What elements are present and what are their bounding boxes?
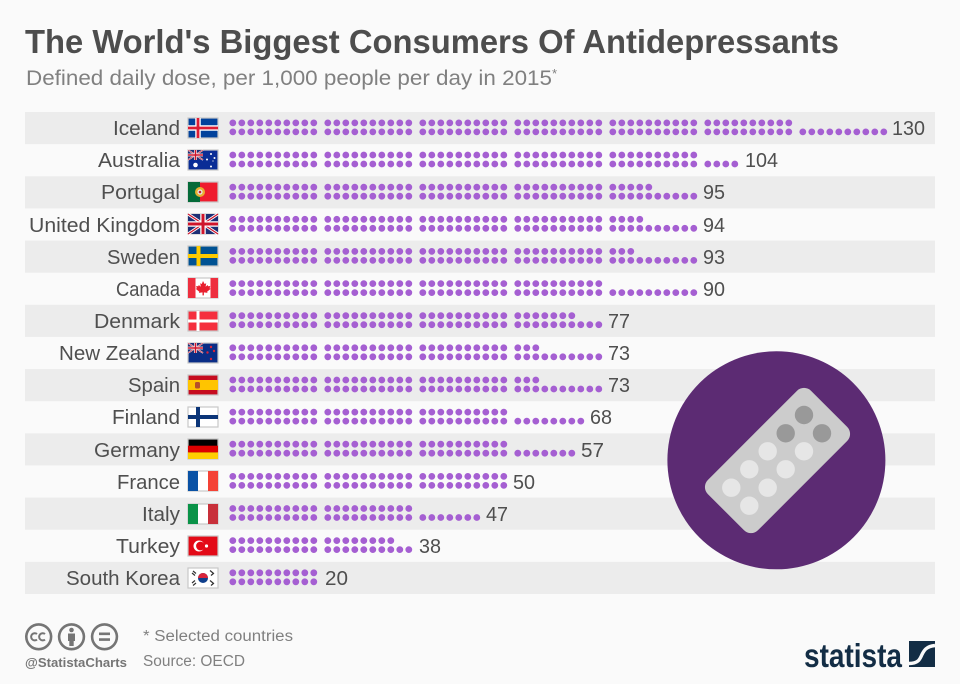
row: Iceland	[25, 112, 935, 144]
label: United Kingdom: United Kingdom	[29, 215, 180, 237]
flag: Portugal	[188, 182, 218, 202]
value: 95: 95	[703, 181, 725, 204]
value: 73: 73	[608, 342, 630, 365]
label: Turkey: Turkey	[116, 536, 180, 558]
value: 77: 77	[608, 310, 630, 333]
icons: creative commons	[26, 624, 117, 649]
label: Italy: Italy	[142, 504, 180, 526]
credit: StatistaCharts: @StatistaCharts	[25, 656, 127, 670]
flag: France	[188, 471, 218, 491]
row: Germany	[25, 433, 935, 465]
subtitle: *	[552, 66, 557, 81]
row: Finland	[112, 406, 612, 429]
label: Finland: Finland	[112, 407, 180, 429]
flag: South Korea	[188, 568, 218, 588]
note: selected countries: * Selected countries	[143, 628, 293, 645]
row: Portugal	[25, 176, 935, 208]
flag: Denmark	[188, 311, 218, 331]
row: Denmark	[25, 305, 935, 337]
label: New Zealand: New Zealand	[59, 343, 180, 365]
flag: United Kingdom	[188, 214, 218, 234]
flag: Turkey	[188, 536, 218, 556]
row: Spain	[25, 369, 935, 401]
dots: 130	[233, 123, 884, 132]
row: Canada	[116, 278, 725, 301]
value: 38: 38	[419, 535, 441, 558]
row: France	[117, 471, 535, 494]
dots: 38	[233, 541, 409, 550]
value: 20: 20	[325, 567, 348, 590]
flag: Australia	[188, 150, 218, 170]
dots: 90	[233, 284, 694, 293]
value: 104: 104	[745, 149, 778, 172]
dots: 73	[233, 348, 599, 357]
dots: 68	[233, 412, 581, 421]
source: Source: OECD	[143, 653, 245, 670]
flag: Canada	[188, 278, 218, 298]
subtitle: Defined daily dose, per 1,000 people per day in 2015	[26, 67, 552, 90]
label: Portugal: Portugal	[101, 182, 180, 204]
row: United Kingdom	[29, 214, 725, 237]
flag: New Zealand	[188, 343, 218, 363]
row: New Zealand	[59, 342, 630, 365]
dots: 77	[233, 316, 599, 325]
flag: Italy	[188, 504, 218, 524]
value: 93: 93	[703, 246, 725, 269]
value: 73: 73	[608, 374, 630, 397]
label: France: France	[117, 472, 180, 494]
flag: Germany	[188, 439, 218, 459]
label: Canada: Canada	[116, 279, 181, 301]
dots: 47	[233, 508, 477, 518]
row: Sweden	[25, 241, 935, 273]
value: 47: 47	[486, 503, 508, 526]
row: South Korea	[25, 562, 935, 594]
icon: blister pack on purple circle	[667, 351, 885, 569]
row: Italy	[25, 498, 935, 530]
dots: 94	[233, 219, 694, 228]
flag: Sweden	[188, 246, 218, 266]
title: The World's Biggest Consumers Of Antidepressants	[25, 23, 839, 60]
flag: Finland	[188, 407, 218, 427]
value: 50: 50	[513, 471, 535, 494]
dots: 20	[233, 573, 314, 582]
value: 68: 68	[590, 406, 612, 429]
label: Germany: Germany	[94, 440, 180, 462]
dots: 93	[233, 251, 694, 260]
label: Denmark: Denmark	[94, 311, 181, 333]
value: 130: 130	[892, 117, 925, 140]
dots: 73	[233, 380, 599, 389]
dots: 57	[233, 444, 572, 453]
dots: 50	[233, 476, 504, 485]
logo: statista: statista	[804, 637, 903, 674]
dots: 95	[233, 187, 694, 196]
label: Iceland: Iceland	[113, 118, 180, 140]
label: Spain: Spain	[128, 375, 180, 397]
dots: 104	[233, 155, 735, 164]
label: Sweden: Sweden	[107, 247, 180, 269]
flag: Spain	[188, 375, 218, 395]
label: Australia: Australia	[98, 150, 181, 172]
row: Australia	[98, 149, 778, 172]
value: 57: 57	[581, 439, 604, 462]
value: 90: 90	[703, 278, 725, 301]
flag: Iceland	[188, 118, 218, 138]
row: Turkey	[116, 535, 441, 558]
label: South Korea: South Korea	[66, 568, 181, 590]
value: 94: 94	[703, 214, 725, 237]
